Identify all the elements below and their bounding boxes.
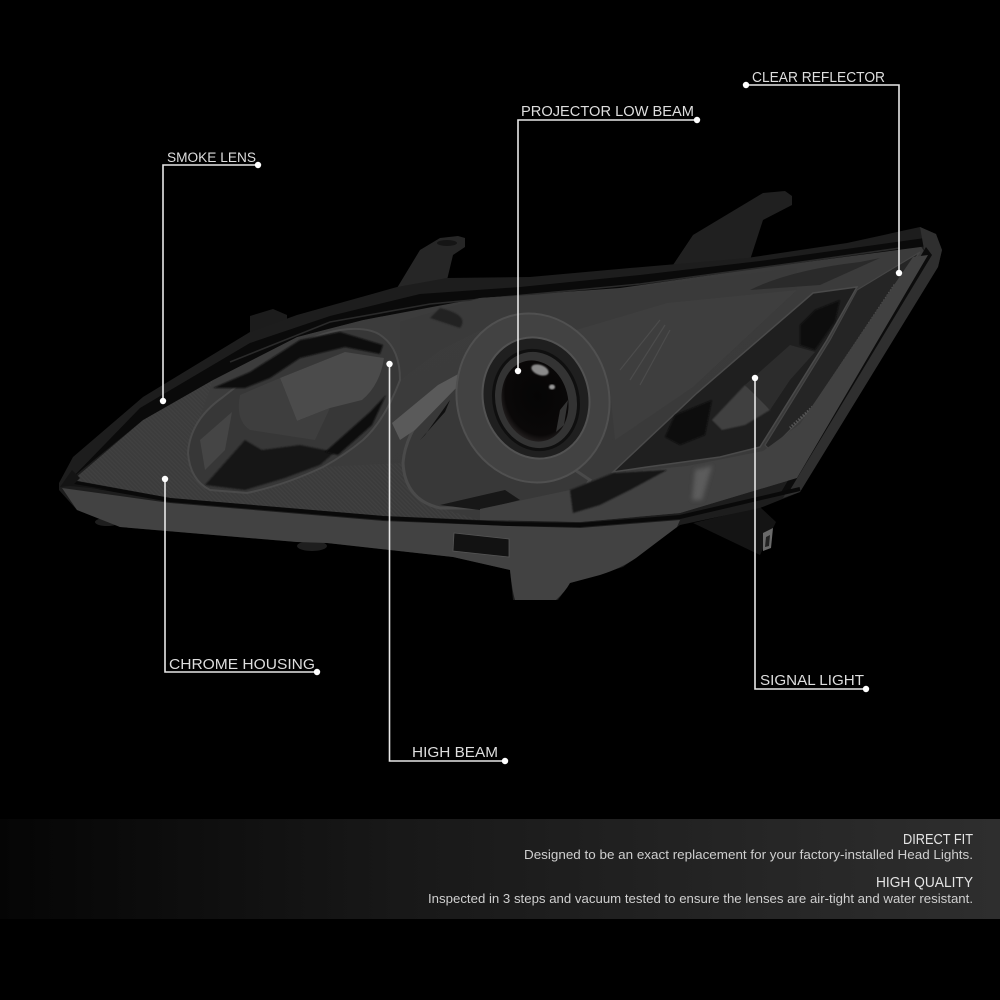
high beam reflector: [188, 329, 400, 493]
upper black trim band: [72, 238, 928, 478]
reflector dark shards: [213, 332, 383, 388]
projector glass: [493, 353, 577, 449]
callout: smoke lens: [160, 150, 261, 404]
lower chrome panel: [480, 255, 928, 522]
lower housing strip: [62, 488, 680, 600]
reflector bright patch: [280, 352, 384, 421]
top tab detail: [750, 258, 880, 290]
black swoosh: [570, 470, 667, 513]
callout: high beam: HIGH BEAM: [412, 744, 498, 761]
projector lens assembly: [439, 297, 627, 499]
reflector lower shards: [205, 440, 335, 490]
callout: projector low beam: PROJECTOR LOW BEAM: [521, 103, 694, 120]
callout: high beam: [386, 361, 508, 764]
callout: clear reflector: [743, 69, 902, 276]
feature heading: direct fit: DIRECT FIT: [903, 831, 973, 848]
feature heading: high quality: HIGH QUALITY: [876, 874, 973, 891]
reflector outline: [188, 329, 400, 493]
upper reflector bay: [400, 268, 797, 440]
callout: chrome housing: [162, 476, 320, 675]
feature text: high quality: Inspected in 3 steps and vacuum tested to ensure the lenses are air-tight and water resistant.: [428, 891, 973, 906]
projector surround oval: [392, 372, 590, 510]
housing outer silhouette: [59, 227, 942, 600]
feature text: direct fit: Designed to be an exact replacement for your factory-installed Head Lights.: [524, 847, 973, 862]
clear reflector strip: [765, 252, 920, 450]
inner ring: [470, 326, 602, 470]
bottom black trim line: [70, 482, 800, 525]
grey streak: [712, 385, 770, 430]
panel light streak: [692, 466, 712, 500]
lens panel: [73, 245, 928, 522]
headlight assembly: [59, 191, 942, 600]
lens texture: [73, 380, 480, 520]
right outer frame: [783, 227, 942, 498]
callout: clear reflector: CLEAR REFLECTOR: [752, 69, 885, 86]
callout: signal light: SIGNAL LIGHT: [760, 672, 864, 689]
vent rectangle: [453, 533, 509, 557]
mounting tabs and brackets: [95, 191, 792, 555]
bottom feature band: [0, 819, 1000, 919]
left tip detail: [60, 470, 110, 490]
callout: smoke lens: SMOKE LENS: [167, 150, 256, 165]
outer ring: [439, 297, 627, 499]
callout: signal light: [752, 375, 869, 692]
callout: projector low beam: [515, 103, 700, 374]
black reflector blobs: [665, 400, 712, 445]
glass reflections: [530, 362, 550, 378]
callout: chrome housing: CHROME HOUSING: [169, 656, 315, 673]
chrome highlight band: [392, 372, 462, 440]
signal light wedge: [613, 287, 857, 472]
